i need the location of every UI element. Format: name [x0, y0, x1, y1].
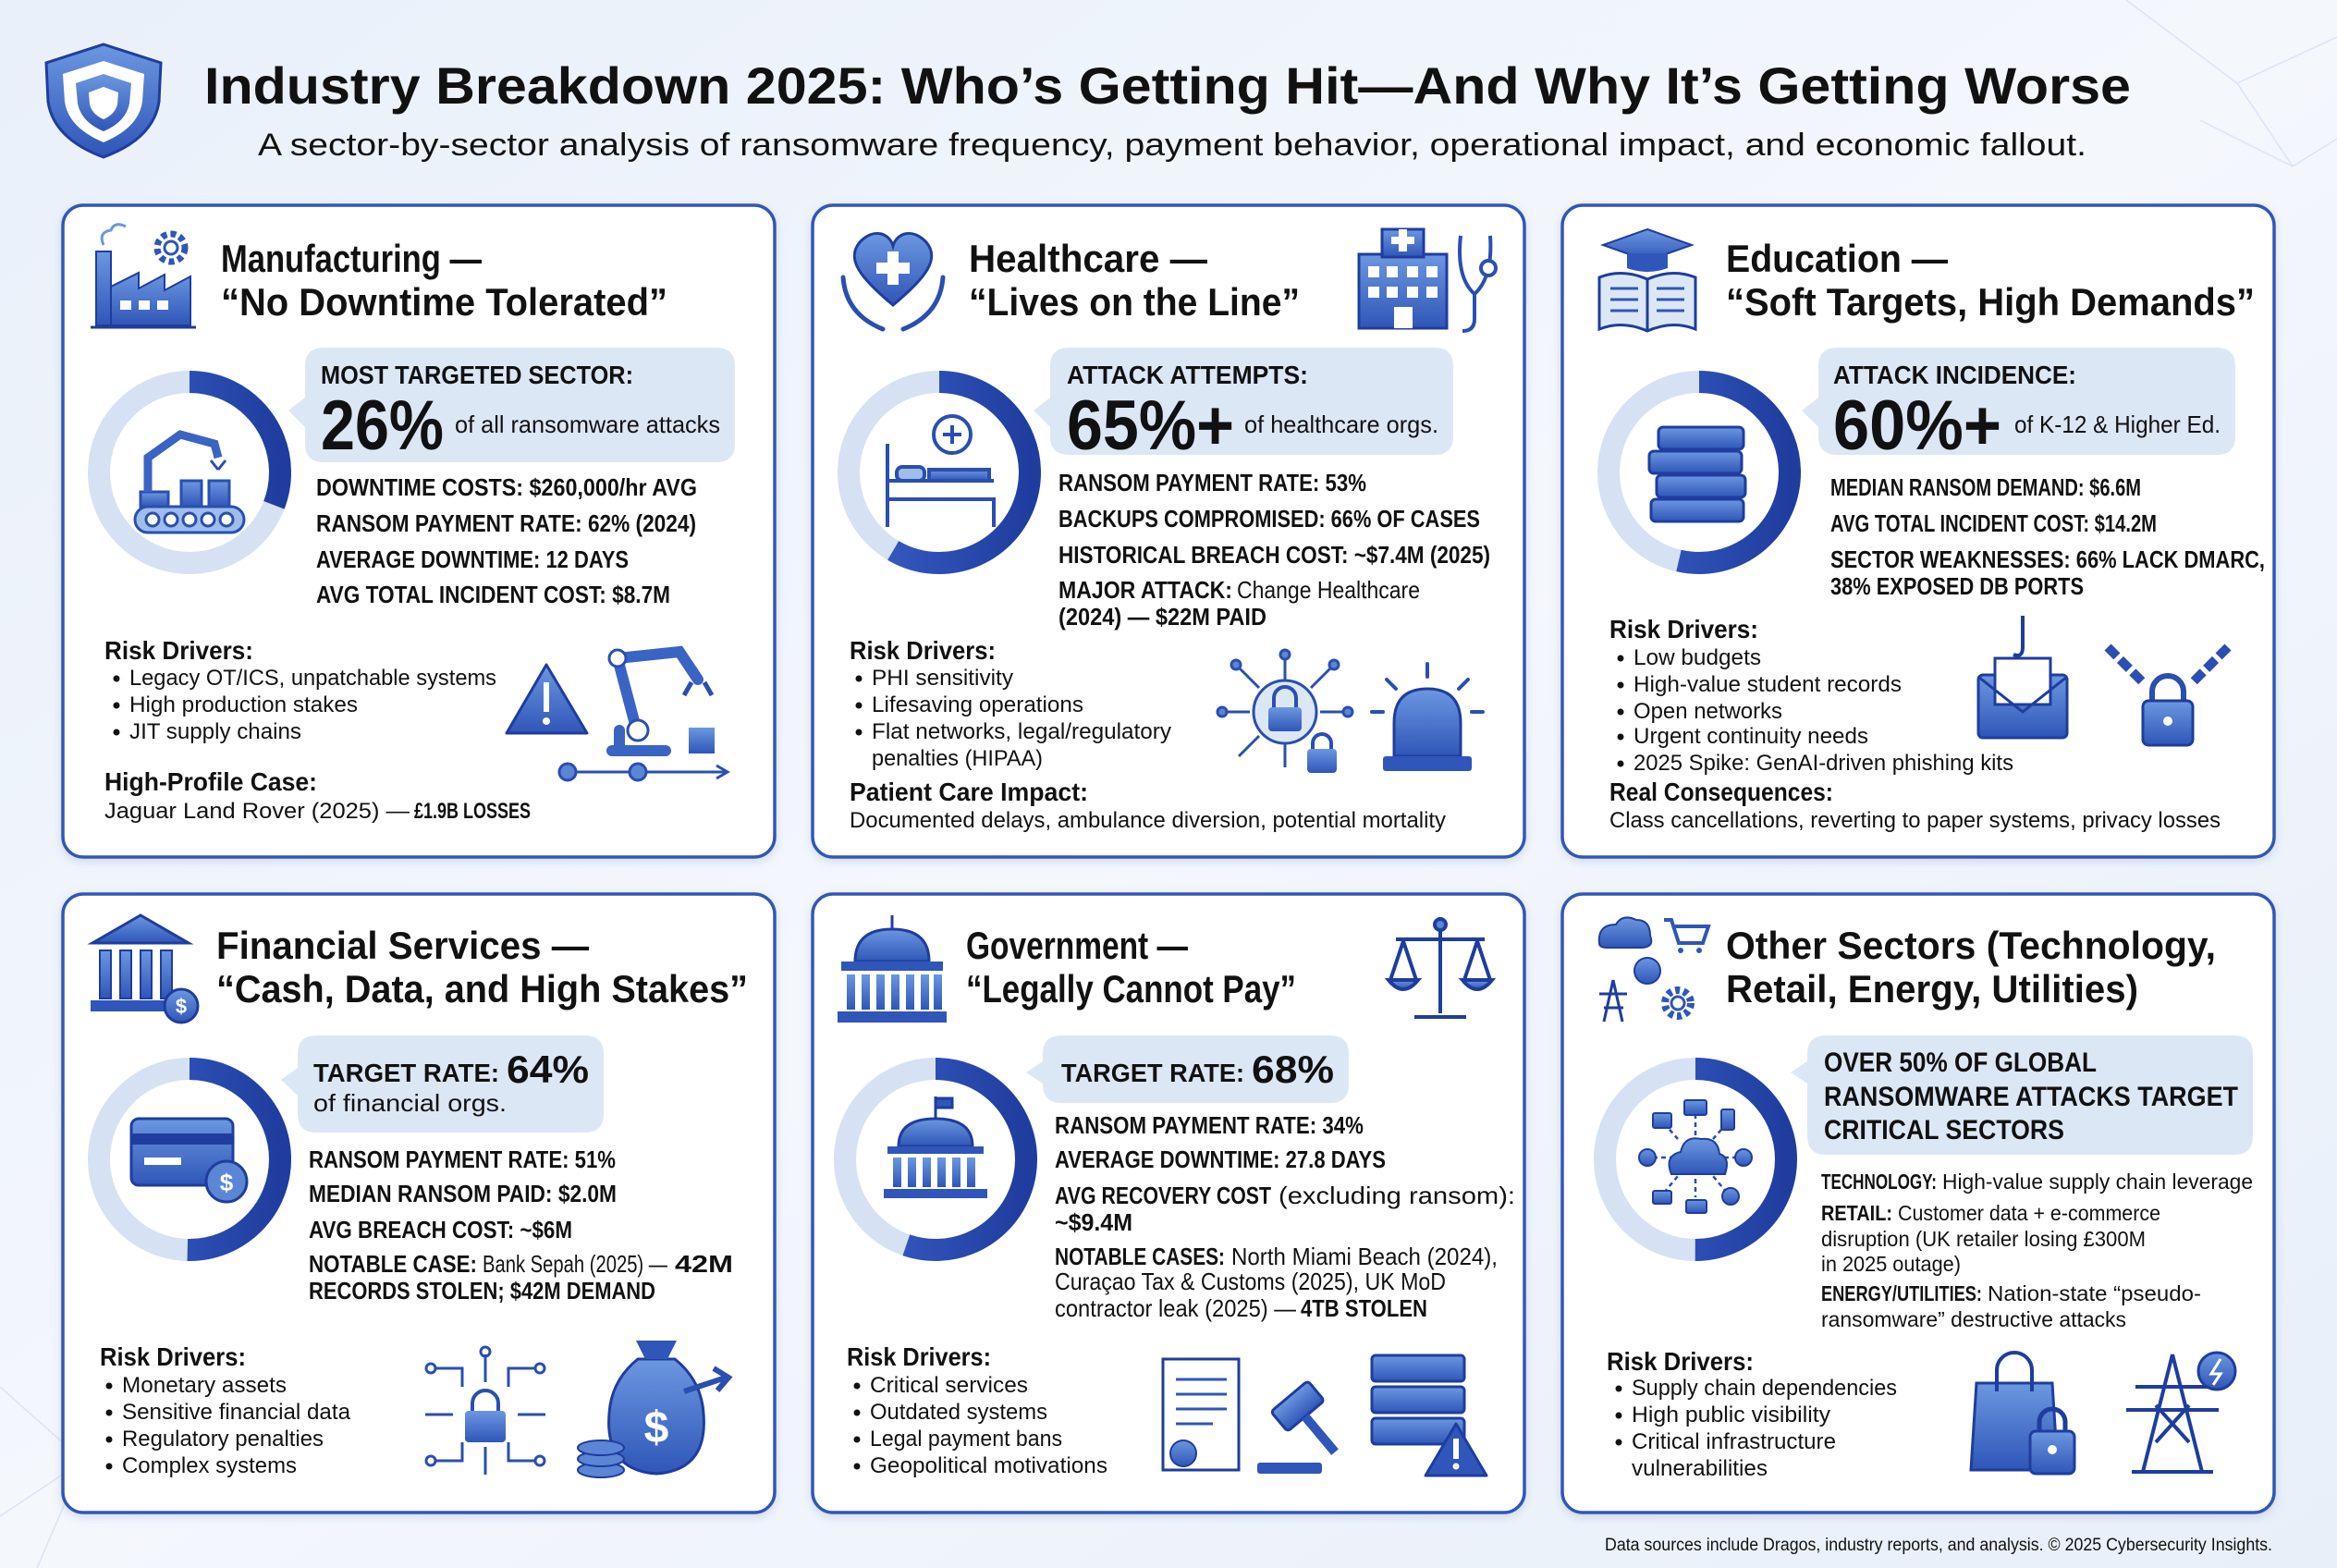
stats: RECORDS STOLEN; $42M DEMAND: [309, 1277, 655, 1305]
stats: RANSOM PAYMENT RATE: 62% (2024): [316, 509, 696, 537]
icon: factory: [91, 225, 196, 327]
risk drivers: 2025 Spike: GenAI-driven phishing kits: [1633, 751, 2013, 776]
risk drivers: Risk Drivers:: [100, 1342, 246, 1371]
callout: over 50%: RANSOMWARE ATTACKS TARGET: [1824, 1082, 2238, 1112]
risk drivers: Supply chain dependencies: [1632, 1376, 1897, 1401]
real consequences: [1609, 778, 2221, 833]
callout: target rate 64: 64%: [507, 1047, 589, 1091]
stats: [1055, 1111, 1515, 1322]
callout: most targeted: MOST TARGETED SECTOR:: [321, 361, 633, 389]
risk drivers: Urgent continuity needs: [1633, 724, 1868, 749]
stats: [1830, 473, 2265, 600]
sector details: disruption (UK retailer losing £300M: [1821, 1227, 2146, 1251]
stats: MEDIAN RANSOM PAID: $2.0M: [309, 1180, 617, 1207]
callout: over 50%: OVER 50% OF GLOBAL: [1824, 1047, 2097, 1078]
heading: Manufacturing —: [221, 237, 482, 280]
stats: DOWNTIME COSTS: $260,000/hr AVG: [316, 473, 697, 501]
sector details: RETAIL:: [1821, 1201, 1892, 1225]
risk drivers: [104, 636, 496, 744]
risk drivers: Monetary assets: [122, 1373, 287, 1398]
risk drivers: [850, 636, 1171, 771]
icon: shopping bag lock and power tower: [1971, 1353, 2235, 1474]
panel: education: [1562, 205, 2274, 857]
stats: [316, 473, 697, 608]
stats: contractor leak (2025) —: [1055, 1294, 1296, 1322]
heading: “No Downtime Tolerated”: [221, 280, 667, 324]
risk drivers: Sensitive financial data: [122, 1400, 351, 1425]
risk drivers: Low budgets: [1633, 645, 1761, 670]
risk drivers: Flat networks, legal/regulatory: [872, 719, 1171, 744]
donut chart: [1605, 1069, 1786, 1250]
stats: (2024) — $22M PAID: [1058, 603, 1266, 631]
icon: bank: $: [176, 995, 187, 1018]
risk drivers: Critical services: [870, 1373, 1028, 1398]
icon: cloud network: [1639, 1100, 1752, 1213]
risk drivers: Critical infrastructure: [1632, 1429, 1836, 1454]
high-profile case: High-Profile Case:: [104, 767, 317, 796]
donut chart: [99, 382, 280, 563]
callout: target rate 68: [1026, 1035, 1349, 1103]
panel: government: [813, 894, 1524, 1513]
sector details: in 2025 outage): [1821, 1252, 1961, 1276]
stats: Curaçao Tax & Customs (2025), UK MoD: [1055, 1268, 1446, 1295]
risk drivers: [1609, 615, 2013, 776]
heading: “Lives on the Line”: [969, 280, 1300, 324]
heading: [216, 924, 748, 1011]
stats: 38% EXPOSED DB PORTS: [1830, 572, 2084, 600]
callout: attack attempts: ATTACK ATTEMPTS:: [1067, 361, 1308, 389]
donut chart: [1609, 382, 1790, 563]
risk drivers: Risk Drivers:: [104, 636, 253, 665]
callout: target rate 68: TARGET RATE:: [1061, 1059, 1244, 1087]
risk drivers: Open networks: [1633, 699, 1782, 724]
logo: shield: [46, 44, 161, 157]
callout: most targeted: 26%: [321, 386, 444, 465]
icon: circuit lock and money bag: [425, 1341, 728, 1477]
callout: attack incidence: 60%+: [1833, 386, 2001, 465]
stats: AVG RECOVERY COST: [1055, 1182, 1271, 1209]
callout: target rate 68: 68%: [1252, 1047, 1334, 1091]
heading: [221, 237, 667, 324]
sector details: Customer data + e-commerce: [1898, 1201, 2160, 1225]
callout: attack incidence: of K-12 & Higher Ed.: [2014, 410, 2221, 438]
icon: hospital stethoscope: [1359, 229, 1496, 331]
high-profile case: Jaguar Land Rover (2025) —: [104, 799, 410, 824]
icon: document, gavel, server warning: [1163, 1355, 1487, 1476]
sector details: TECHNOLOGY:: [1821, 1170, 1937, 1194]
heading: Retail, Energy, Utilities): [1726, 967, 2138, 1011]
patient care impact: Documented delays, ambulance diversion, potential mortality: [850, 808, 1446, 833]
sector details: ENERGY/UTILITIES:: [1821, 1281, 1982, 1305]
high-profile case: [104, 767, 531, 824]
sector details: ransomware” destructive attacks: [1821, 1307, 2126, 1331]
risk drivers: Legacy OT/ICS, unpatchable systems: [129, 666, 496, 691]
donut chart: [845, 1069, 1026, 1250]
stats: North Miami Beach (2024),: [1231, 1243, 1498, 1270]
stats: AVERAGE DOWNTIME: 27.8 DAYS: [1055, 1145, 1386, 1173]
icon: government building: [884, 1096, 987, 1198]
callout: attack attempts: of healthcare orgs.: [1244, 410, 1438, 438]
stats: [309, 1145, 733, 1305]
risk drivers: Risk Drivers:: [1609, 615, 1758, 643]
patient care impact: Patient Care Impact:: [850, 778, 1088, 806]
stats: 4TB STOLEN: [1301, 1294, 1427, 1322]
panel: healthcare: [813, 205, 1524, 857]
stats: (excluding ransom):: [1279, 1182, 1515, 1209]
stats: AVG TOTAL INCIDENT COST: $14.2M: [1830, 509, 2157, 537]
risk drivers: Geopolitical motivations: [870, 1453, 1107, 1478]
heading: [1726, 924, 2216, 1011]
real consequences: Real Consequences:: [1609, 778, 1833, 806]
stats: Bank Sepah (2025) —: [483, 1250, 667, 1278]
icon: bank: [91, 915, 198, 1023]
risk drivers: JIT supply chains: [129, 719, 301, 744]
icon: credit card and coin: [131, 1119, 247, 1202]
icon: circuit lock and alarm: [1217, 650, 1483, 773]
sector details: High-value supply chain leverage: [1942, 1170, 2253, 1194]
stats: BACKUPS COMPROMISED: 66% OF CASES: [1058, 505, 1480, 533]
risk drivers: Legal payment bans: [870, 1427, 1062, 1452]
icon: phishing envelope and chain lock: [1978, 616, 2228, 745]
heading: Government —: [966, 924, 1188, 967]
stats: RANSOM PAYMENT RATE: 53%: [1058, 469, 1366, 496]
risk drivers: Complex systems: [122, 1453, 297, 1478]
donut chart: [849, 382, 1030, 563]
icon: hospital bed: [887, 416, 994, 527]
risk drivers: [100, 1342, 351, 1478]
stats: NOTABLE CASES:: [1055, 1243, 1225, 1270]
callout: target rate 64: of financial orgs.: [313, 1089, 507, 1117]
high-profile case: £1.9B LOSSES: [414, 799, 531, 824]
icon: scales: [1389, 917, 1492, 1017]
callout: over 50%: CRITICAL SECTORS: [1824, 1115, 2064, 1145]
risk drivers: Lifesaving operations: [872, 692, 1083, 717]
stats: RANSOM PAYMENT RATE: 34%: [1055, 1111, 1364, 1139]
sector details: [1821, 1170, 2253, 1331]
risk drivers: Risk Drivers:: [847, 1342, 991, 1371]
risk drivers: [847, 1342, 1107, 1478]
panel: financial services: [63, 894, 775, 1513]
callout: attack incidence: ATTACK INCIDENCE:: [1833, 361, 2076, 389]
callout: attack attempts: [1034, 348, 1453, 465]
stats: RANSOM PAYMENT RATE: 51%: [309, 1145, 616, 1173]
callout: most targeted: [288, 348, 735, 465]
subtitle: A sector-by-sector analysis of ransomware frequency, payment behavior, operational impact, and economic fallout.: [258, 128, 2086, 163]
stats: AVERAGE DOWNTIME: 12 DAYS: [316, 545, 629, 573]
risk drivers: Risk Drivers:: [850, 636, 996, 665]
stats: 42M: [675, 1250, 733, 1278]
stats: ~$9.4M: [1055, 1208, 1132, 1236]
risk drivers: penalties (HIPAA): [872, 746, 1043, 771]
donut chart: [99, 1069, 280, 1250]
stats: NOTABLE CASE:: [309, 1250, 477, 1278]
stats: MEDIAN RANSOM DEMAND: $6.6M: [1830, 473, 2141, 501]
risk drivers: High-value student records: [1633, 672, 1902, 697]
icon: books: [1649, 427, 1745, 521]
risk drivers: High production stakes: [129, 692, 358, 717]
icon: warning and robot arm: [507, 650, 728, 780]
icon: credit card and coin: $: [220, 1169, 234, 1196]
risk drivers: High public visibility: [1632, 1403, 1830, 1427]
callout: attack attempts: 65%+: [1067, 386, 1234, 465]
heading: “Legally Cannot Pay”: [966, 967, 1296, 1011]
callout: over 50%: [1791, 1035, 2253, 1155]
risk drivers: PHI sensitivity: [872, 666, 1013, 691]
icon: heart hands: [843, 233, 943, 329]
stats: HISTORICAL BREACH COST: ~$7.4M (2025): [1058, 541, 1490, 569]
callout: attack incidence: [1802, 348, 2235, 465]
icon: cloud cart tower gear: [1599, 917, 1708, 1022]
stats: SECTOR WEAKNESSES: 66% LACK DMARC,: [1830, 545, 2265, 573]
footer: sources: Data sources include Dragos, industry reports, and analysis. © 2025 Cybersecurity Insights.: [1605, 1536, 2272, 1555]
icon: book and cap: [1599, 229, 1695, 331]
title: Industry Breakdown 2025: Who’s Getting Hit—And Why It’s Getting Worse: [204, 56, 2131, 115]
sector details: Nation-state “pseudo-: [1988, 1281, 2201, 1305]
stats: MAJOR ATTACK:: [1058, 576, 1232, 604]
callout: most targeted: of all ransomware attacks: [455, 410, 720, 438]
stats: AVG TOTAL INCIDENT COST: $8.7M: [316, 581, 670, 608]
icon: circuit lock and money bag: $: [644, 1403, 669, 1452]
callout: target rate 64: TARGET RATE:: [313, 1059, 499, 1087]
heading: [1726, 237, 2255, 324]
stats: [1058, 469, 1490, 631]
risk drivers: Regulatory penalties: [122, 1427, 324, 1452]
patient care impact: [850, 778, 1446, 833]
panel: manufacturing: [63, 205, 775, 857]
risk drivers: Outdated systems: [870, 1400, 1047, 1425]
icon: robot conveyor: [135, 435, 244, 533]
stats: AVG BREACH COST: ~$6M: [309, 1216, 572, 1243]
callout: target rate 64: [281, 1035, 604, 1133]
heading: Other Sectors (Technology,: [1726, 924, 2216, 967]
panel: other sectors: [1562, 894, 2274, 1513]
heading: “Cash, Data, and High Stakes”: [216, 967, 748, 1011]
real consequences: Class cancellations, reverting to paper systems, privacy losses: [1609, 808, 2221, 833]
heading: Healthcare —: [969, 237, 1207, 280]
heading: Financial Services —: [216, 924, 589, 967]
heading: Education —: [1726, 237, 1948, 280]
icon: capitol: [838, 915, 947, 1023]
risk drivers: vulnerabilities: [1632, 1456, 1768, 1481]
heading: “Soft Targets, High Demands”: [1726, 280, 2255, 324]
risk drivers: Risk Drivers:: [1607, 1347, 1754, 1376]
risk drivers: [1607, 1347, 1897, 1481]
stats: Change Healthcare: [1237, 576, 1420, 604]
heading: [966, 924, 1296, 1011]
heading: [969, 237, 1300, 324]
